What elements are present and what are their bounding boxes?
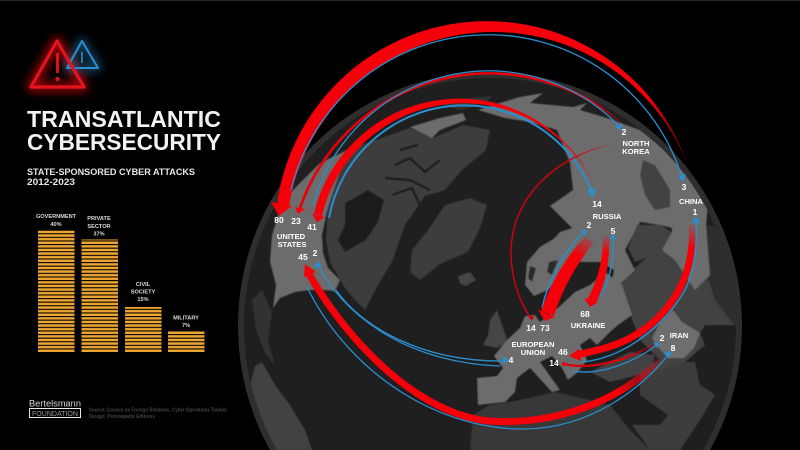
arc: United States to European Union xyxy=(336,290,509,364)
map labels xyxy=(274,127,704,368)
land: Arctic islands xyxy=(440,96,492,110)
map labels: KOREA xyxy=(622,147,650,156)
map labels: 2 xyxy=(587,220,592,230)
arc: European Union to United States xyxy=(314,261,500,366)
land: South America xyxy=(250,362,312,450)
land: Africa xyxy=(470,392,650,450)
land: Alaska xyxy=(410,113,466,138)
bar: civil society: SOCIETY xyxy=(131,290,156,296)
arc: Iran to European Union, 14 attacks xyxy=(562,342,658,366)
water: Hudson Bay xyxy=(338,190,384,252)
map labels: 2 xyxy=(313,248,318,258)
land: Greenland xyxy=(410,198,487,280)
map labels: 8 xyxy=(671,343,676,353)
arc: Ukraine to Russia xyxy=(600,233,616,297)
logo: Bertelsmann Foundation: FOUNDATION xyxy=(32,411,78,418)
water: Arctic channels xyxy=(385,145,440,205)
land: Kazakhstan xyxy=(628,225,672,262)
land: Europe and Ukraine xyxy=(477,272,632,405)
land: Scandinavia xyxy=(525,235,572,296)
bar: military: MILITARY xyxy=(173,316,199,322)
subtitle: STATE-SPONSORED CYBER ATTACKS xyxy=(27,167,195,178)
map labels: UNITED xyxy=(277,232,306,241)
source note xyxy=(89,408,227,420)
arc: United States to China xyxy=(291,35,686,190)
map labels: 3 xyxy=(682,182,687,192)
map labels: STATES xyxy=(278,240,306,249)
arc: European Union to China xyxy=(582,216,700,362)
bar: military: 7% xyxy=(182,323,190,329)
map labels: IRAN xyxy=(670,331,688,340)
arc: China to European Union, 46 attacks xyxy=(569,224,692,361)
map labels: UKRAINE xyxy=(571,321,605,330)
source note: Design: Puntoaparte Editores xyxy=(89,414,155,420)
arc: United States to North Korea xyxy=(313,71,622,205)
icon: warning triangles xyxy=(31,41,98,87)
map labels: 73 xyxy=(540,323,550,333)
arc: North Korea to European Union, 14 attacks xyxy=(511,145,610,321)
title: TRANSATLANTIC xyxy=(27,106,221,132)
bar: civil society: 15% xyxy=(137,297,149,303)
map labels: 46 xyxy=(558,347,568,357)
land: Russia xyxy=(478,93,708,290)
arc: Russia to United States, 41 attacks xyxy=(312,99,597,222)
arc: North Korea to United States, 23 attacks xyxy=(295,73,622,214)
arc: Iran to United States, 45 attacks xyxy=(304,264,660,422)
map labels: 80 xyxy=(274,215,284,225)
map labels: 45 xyxy=(298,252,308,262)
map labels: 41 xyxy=(307,222,317,232)
bar: private sector xyxy=(82,216,118,352)
map labels: 68 xyxy=(580,309,590,319)
bar: private sector: PRIVATE xyxy=(87,216,111,222)
arc: United States to Iran xyxy=(307,287,672,429)
arc: China to United States, 80 attacks xyxy=(271,21,690,216)
map labels: 14 xyxy=(549,358,559,368)
land: Iran xyxy=(652,310,700,358)
map labels: 4 xyxy=(509,355,514,365)
bar: government xyxy=(36,214,77,352)
logo: Bertelsmann Foundation: Bertelsmann xyxy=(29,398,81,410)
map labels: 23 xyxy=(291,216,301,226)
map labels: EUROPEAN xyxy=(511,340,555,349)
bar chart: attack targets xyxy=(36,214,204,352)
map labels: 14 xyxy=(526,323,536,333)
bar: military xyxy=(168,316,204,352)
map labels: 2 xyxy=(660,333,665,343)
land: United States xyxy=(270,150,347,308)
land: Mongolia xyxy=(640,160,670,210)
land: Mexico and Central America xyxy=(252,290,275,365)
title: CYBERSECURITY xyxy=(27,129,221,155)
land: Iceland xyxy=(458,272,476,286)
map labels: UNION xyxy=(521,348,545,357)
arc: European Union to Russia xyxy=(542,229,587,308)
bar: government: 40% xyxy=(50,222,62,228)
map labels: 1 xyxy=(693,207,698,217)
subtitle: 2012-2023 xyxy=(27,177,75,188)
map labels: 5 xyxy=(611,226,616,236)
logo: Bertelsmann Foundation xyxy=(29,398,81,418)
arc: Russia to Ukraine, 68 attacks xyxy=(584,236,609,307)
land: Turkey xyxy=(590,352,655,382)
map labels: 14 xyxy=(592,199,602,209)
map labels: RUSSIA xyxy=(593,212,622,221)
land: China xyxy=(662,209,710,290)
bar: government: GOVERNMENT xyxy=(36,214,77,220)
map labels: CHINA xyxy=(679,197,704,206)
land: western Asia and India xyxy=(632,362,715,450)
arrowhead xyxy=(271,202,292,216)
source note: Source: Council on Foreign Relations, Cyber Operations Tracker xyxy=(89,408,227,414)
land: Canada xyxy=(326,125,490,310)
arc: Russia to European Union, 73 attacks xyxy=(538,237,594,321)
subtitle xyxy=(27,167,195,188)
globe map xyxy=(238,72,745,450)
title xyxy=(27,106,221,155)
bar: civil society xyxy=(125,282,162,352)
land: United Kingdom xyxy=(483,310,508,348)
arc: United States to Russia xyxy=(329,105,596,218)
bar: private sector: 37% xyxy=(93,232,105,238)
bar: civil society: CIVIL xyxy=(136,282,151,288)
arc: European Union to Iran xyxy=(573,342,660,372)
map labels: NORTH xyxy=(622,139,650,148)
bar: private sector: SECTOR xyxy=(87,224,111,230)
map labels: 2 xyxy=(622,127,627,137)
